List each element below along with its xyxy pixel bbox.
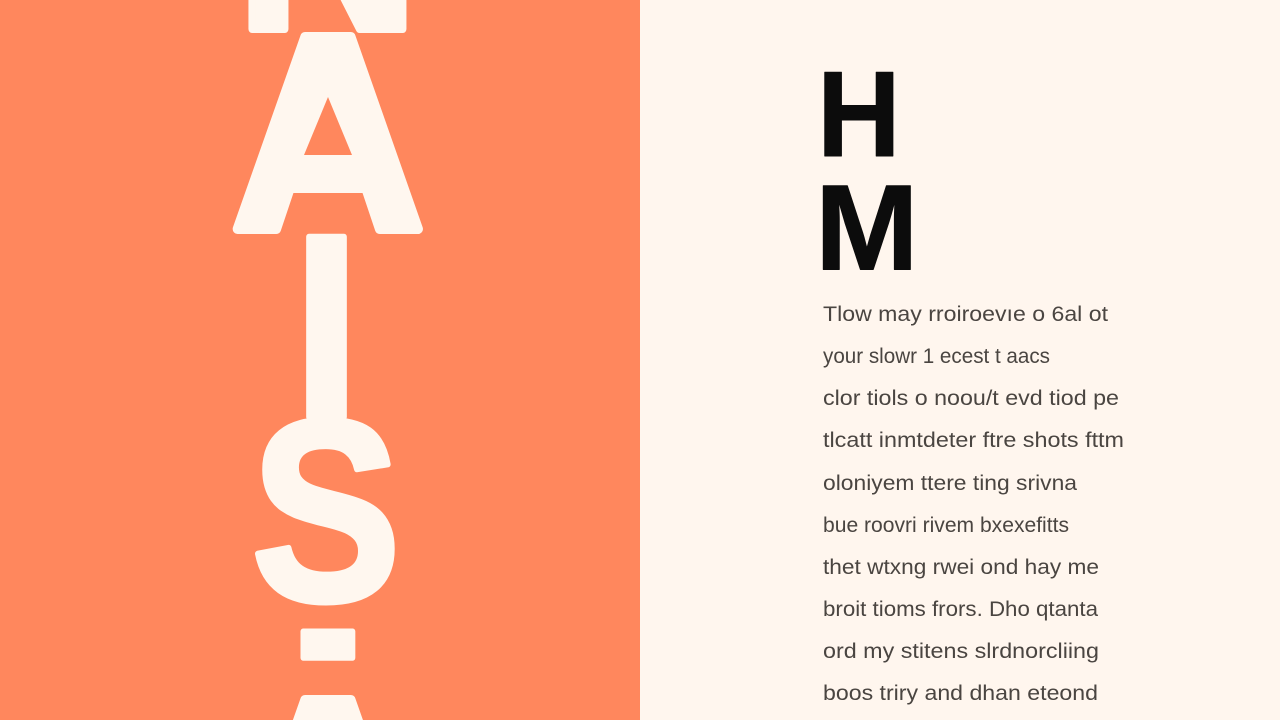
body text block: boos triry and dhan eteond xyxy=(823,682,1098,705)
body text block: Tlow may rroiroevıe o 6al ot xyxy=(823,303,1108,326)
panel: orange left panel xyxy=(0,0,640,720)
letter S: S xyxy=(251,367,401,655)
heading letter M: M xyxy=(815,160,919,296)
body text block: oloniyem ttere ting srivna xyxy=(823,472,1077,495)
body text block xyxy=(823,303,1124,705)
letter I: I xyxy=(293,180,360,473)
body text block: clor tiols o noou/t evd tiod pe xyxy=(823,387,1119,410)
body text block: bue roovri rivem bxexefitts xyxy=(823,514,1069,537)
body text block: thet wtxng rwei ond hay me xyxy=(823,556,1099,579)
body text block: ord my stitens slrdnorcliing xyxy=(823,640,1099,663)
heading letter H: H xyxy=(817,46,901,183)
body text block: broit tioms frors. Dho qtanta xyxy=(823,598,1098,621)
panel: cream right panel xyxy=(640,0,1280,720)
body text block: your slowr 1 ecest t aacs xyxy=(823,345,1050,368)
body text block: tlcatt inmtdeter ftre shots fttm xyxy=(823,429,1124,452)
vertical word of large cream letters xyxy=(231,0,425,720)
